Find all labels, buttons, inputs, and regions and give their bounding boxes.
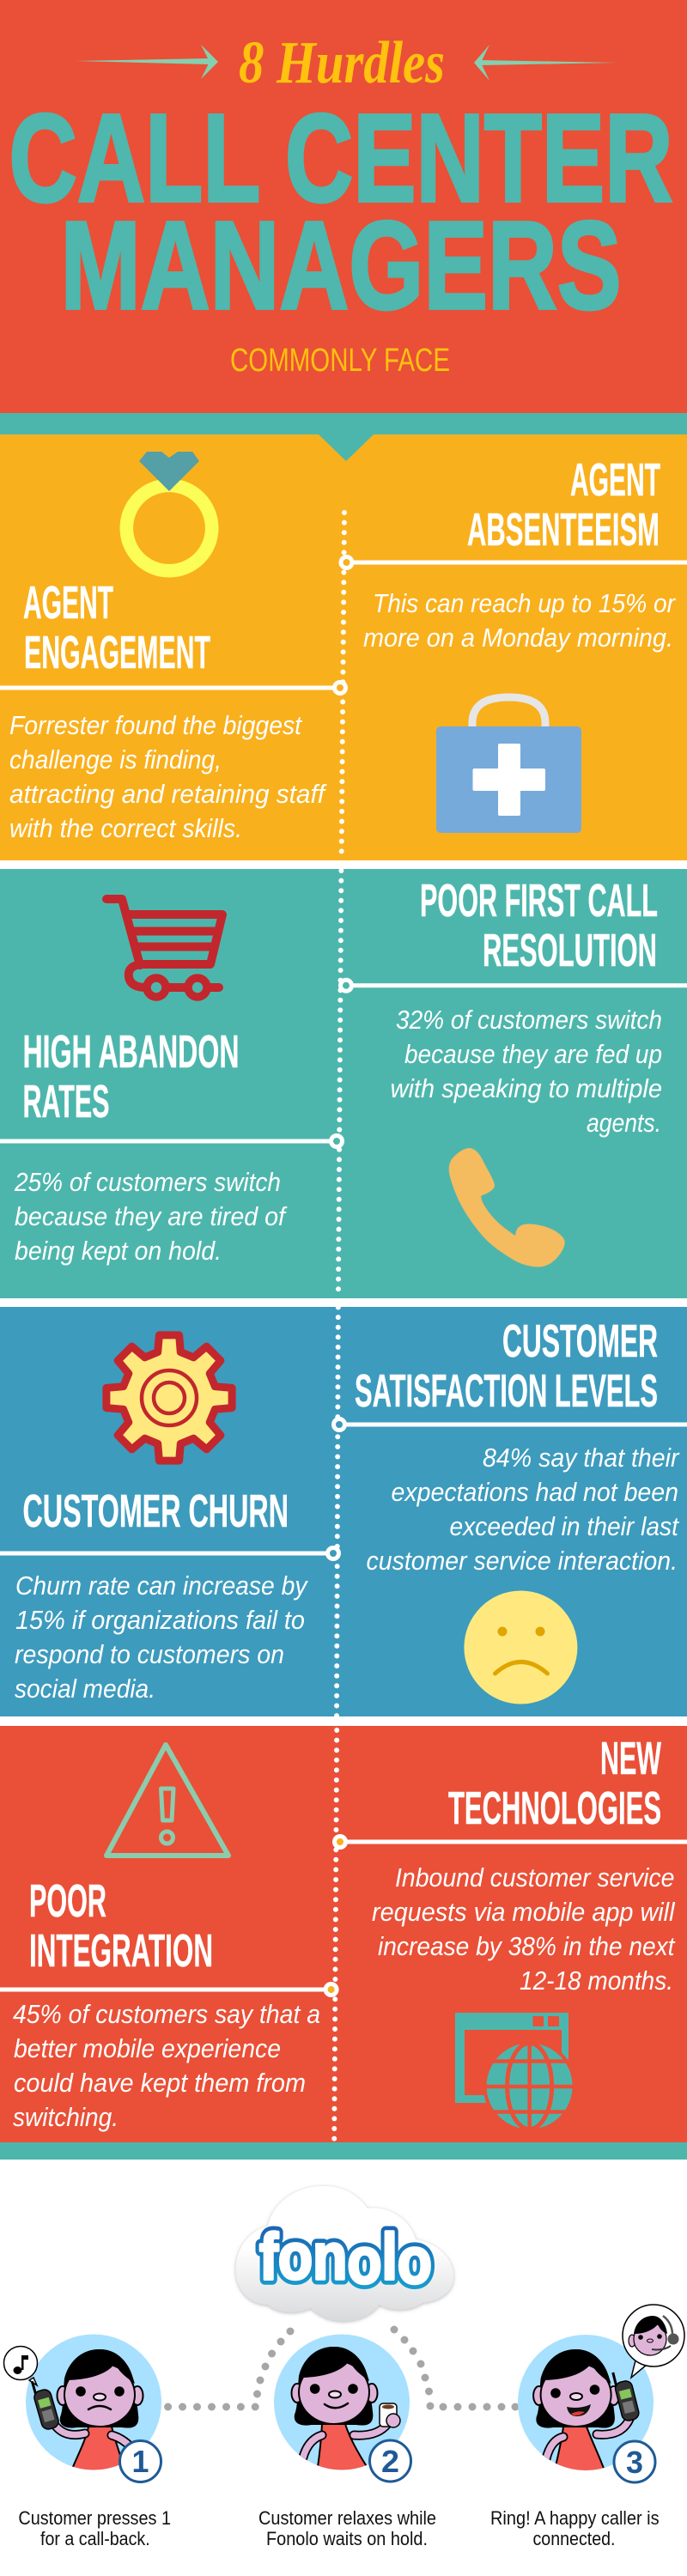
text: poor integration: better mobile experience (14, 2034, 281, 2063)
caption: step 3: Ring! A happy caller is (490, 2507, 660, 2529)
text: new technologies: requests via mobile app will (372, 1898, 676, 1927)
caption: step 3 (490, 2507, 660, 2549)
text: customer churn (15, 1571, 308, 1704)
text: new technologies (372, 1863, 676, 1996)
subtitle: 8 Hurdles: 8 Hurdles (239, 30, 445, 96)
caption: step 3: connected. (532, 2528, 615, 2549)
text: agent engagement (9, 711, 327, 843)
phone (29, 2378, 60, 2431)
heading: high abandon rates (22, 1026, 239, 1127)
step 3: happy caller connected (518, 2305, 684, 2482)
connector left (0, 1133, 344, 1149)
panel: integration and technology hurdles (red) (0, 1726, 687, 2142)
caption: step 1: Customer presses 1 (18, 2507, 171, 2529)
connector left (0, 1982, 339, 1997)
text: agent absenteeism (363, 589, 677, 653)
caption: step 2: Fonolo waits on hold. (266, 2528, 428, 2549)
text: poor first call resolution (390, 1005, 662, 1138)
caption: step 1: for a call-back. (40, 2528, 150, 2549)
heading: poor integration: INTEGRATION (29, 1925, 213, 1977)
header panel (0, 0, 687, 413)
logo wordmark outline: fonolo (259, 2221, 432, 2298)
step number 1 (120, 2440, 161, 2482)
text: high abandon rates (14, 1168, 288, 1266)
footer band (0, 2142, 687, 2160)
text: customer satisfaction: 84% say that their (483, 1443, 680, 1473)
text: poor integration: switching. (13, 2103, 119, 2132)
panel: agent hurdles (yellow) (0, 434, 687, 860)
caption: step 1 (18, 2507, 171, 2549)
text: customer churn: Churn rate can increase by (15, 1571, 308, 1601)
connector right (338, 555, 687, 570)
step number 2 (369, 2440, 410, 2482)
dotted path left (164, 2327, 294, 2411)
text: customer churn: social media. (15, 1674, 155, 1704)
heading: agent engagement: AGENT (23, 577, 113, 629)
caption: step 2 (258, 2507, 436, 2549)
dotted path right (390, 2325, 519, 2411)
tagline: commonly face: COMMONLY FACE (230, 343, 450, 379)
logo wordmark: fonolo (259, 2221, 432, 2298)
connector left (0, 680, 348, 696)
phone (611, 2369, 641, 2422)
text: poor integration: could have kept them from (14, 2069, 306, 2098)
text: customer satisfaction (366, 1443, 680, 1576)
text: agent absenteeism: more on a Monday morning. (363, 623, 673, 653)
step number 2: 2 (381, 2444, 399, 2479)
arrow: left pointing to subtitle (75, 45, 218, 79)
text: poor first call resolution: because they are fed up (404, 1040, 662, 1069)
panel: abandon and resolution hurdles (teal) (0, 869, 687, 1298)
text: agent engagement: challenge is finding, (9, 745, 222, 775)
text: poor first call resolution: with speaking to multiple (390, 1074, 662, 1103)
text: new technologies: Inbound customer service (395, 1863, 675, 1893)
text: customer churn: respond to customers on (15, 1640, 284, 1669)
step number 3: 3 (626, 2445, 643, 2480)
icon: sad face (464, 1590, 577, 1704)
panel: customer hurdles (blue) (0, 1307, 687, 1717)
step number 1: 1 (132, 2444, 149, 2479)
text: poor first call resolution: agents. (587, 1109, 661, 1138)
text: new technologies: 12-18 months. (520, 1966, 673, 1996)
connector right (331, 1417, 687, 1432)
heading: agent engagement (23, 577, 210, 678)
icon: first aid kit (436, 697, 581, 833)
heading: high abandon rates: RATES (22, 1076, 110, 1127)
icon: warning triangle (106, 1745, 228, 1856)
text: high abandon rates: 25% of customers switch (14, 1168, 281, 1197)
heading: poor integration: POOR (29, 1875, 106, 1927)
heading: poor integration (29, 1875, 213, 1977)
heading: customer churn: CUSTOMER CHURN (22, 1485, 289, 1537)
coffee cup (380, 2403, 400, 2427)
icon: diamond ring (126, 452, 212, 571)
text: poor first call resolution: 32% of customers switch (396, 1005, 662, 1035)
icon: browser window with globe (455, 2013, 576, 2131)
heading: new technologies (448, 1733, 661, 1834)
title (9, 88, 673, 335)
fonolo cloud logo (236, 2186, 453, 2321)
connector right (332, 1834, 687, 1850)
text: poor integration: 45% of customers say that a (13, 2000, 320, 2029)
text: agent engagement: attracting and retaining staff (9, 780, 327, 809)
teal band with pointer (0, 413, 687, 461)
arrow: right pointing to subtitle (474, 45, 617, 81)
icon: telephone handset (449, 1148, 565, 1267)
text: poor integration (13, 2000, 320, 2132)
heading: agent absenteeism (467, 454, 660, 556)
text: agent engagement: Forrester found the biggest (9, 711, 302, 740)
connector right (338, 978, 687, 993)
step number 3 (614, 2441, 655, 2482)
text: agent engagement: with the correct skills. (9, 814, 242, 843)
heading: high abandon rates: HIGH ABANDON (22, 1026, 239, 1078)
speech bubble: music note (3, 2346, 38, 2385)
text: high abandon rates: because they are tired of (15, 1202, 288, 1231)
connector left (0, 1546, 341, 1561)
icon: gear (106, 1335, 232, 1461)
speech bubble: agent with headset (623, 2305, 684, 2378)
heading: agent engagement: ENGAGEMENT (24, 627, 210, 678)
step 1: customer presses 1 (3, 2334, 161, 2482)
text: customer churn: 15% if organizations fail to (15, 1606, 305, 1635)
heading: poor first call resolution (420, 875, 658, 976)
icon: shopping cart (106, 899, 222, 997)
caption: step 2: Customer relaxes while (258, 2507, 436, 2529)
step 2: customer relaxes (274, 2334, 410, 2482)
text: high abandon rates: being kept on hold. (15, 1236, 222, 1266)
heading: customer satisfaction levels (355, 1315, 658, 1417)
